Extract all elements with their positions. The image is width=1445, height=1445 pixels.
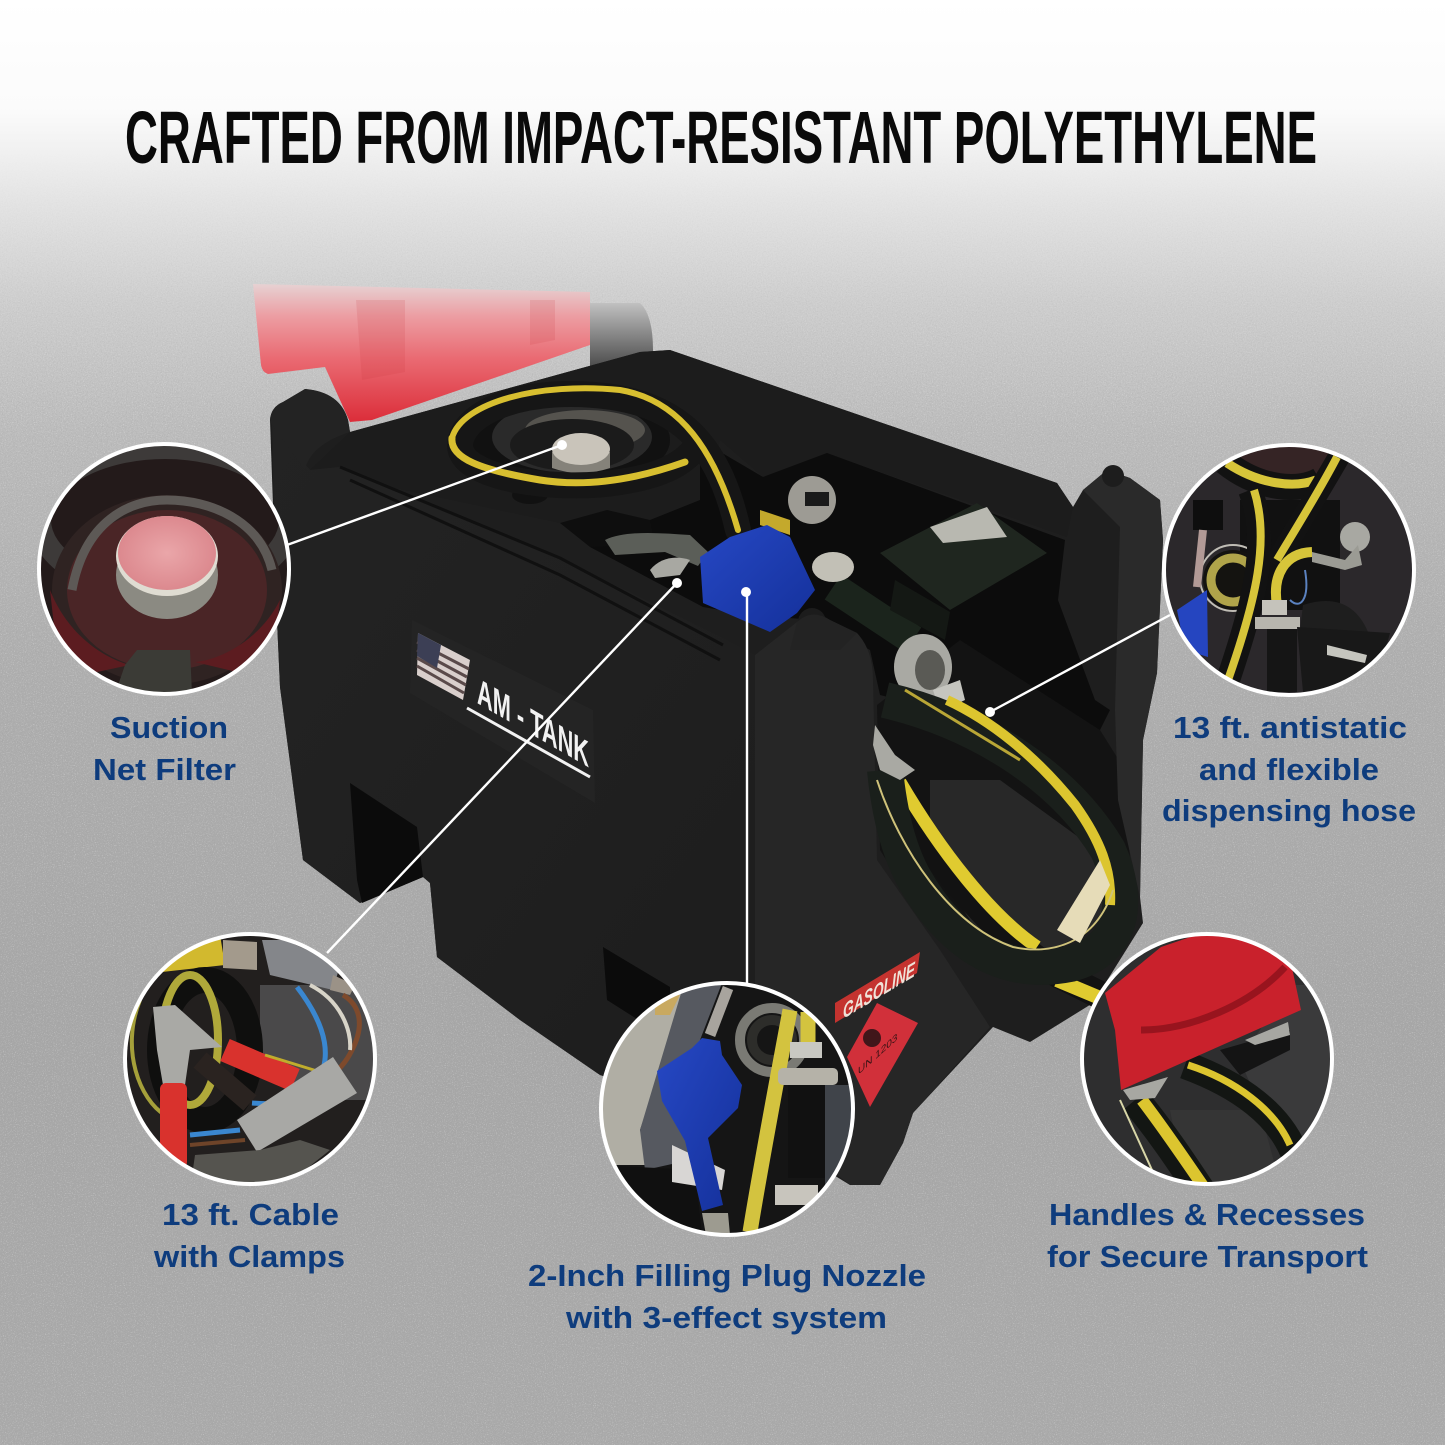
leader lines xyxy=(287,445,1170,985)
right end post xyxy=(1083,470,1163,897)
detail photo: clamps and cable xyxy=(120,934,375,1190)
front post cap over nozzle xyxy=(790,614,857,650)
tank silhouette xyxy=(270,350,1163,1185)
ring xyxy=(601,983,853,1235)
top deck plate xyxy=(310,350,1073,540)
callout: suction net filter xyxy=(39,444,290,787)
label xyxy=(93,710,236,787)
detail photo: blue nozzle xyxy=(601,983,855,1235)
grab slot xyxy=(560,510,655,547)
suction hose ring xyxy=(452,388,738,530)
front right pillar xyxy=(755,614,990,1185)
label: dispensing hose xyxy=(1162,793,1416,828)
gasoline hazard labels: GASOLINE xyxy=(843,956,915,1024)
gasoline hazard labels xyxy=(835,952,920,1107)
hose clamp xyxy=(873,725,915,780)
callout: handles and recesses xyxy=(1047,930,1368,1274)
label xyxy=(1162,710,1416,828)
open red lid xyxy=(253,284,653,422)
gasoline hazard labels: UN 1203 xyxy=(858,1030,898,1078)
tray floor behind hose xyxy=(877,640,1130,960)
filler bowl with cap xyxy=(460,392,670,504)
leader dots xyxy=(557,440,995,717)
ring xyxy=(125,934,375,1184)
label: with Clamps xyxy=(153,1239,345,1274)
label: Net Filter xyxy=(93,752,236,787)
warning sticker xyxy=(1057,860,1110,943)
ring xyxy=(1164,445,1414,695)
label: Suction xyxy=(110,710,228,745)
callout: cable with clamps xyxy=(120,934,375,1274)
detail photo: filter cap xyxy=(39,444,290,694)
label xyxy=(153,1197,345,1274)
coiled dispensing hose xyxy=(877,690,1120,1000)
detail photo: red handle xyxy=(1082,930,1335,1190)
label: 2-Inch Filling Plug Nozzle xyxy=(528,1258,926,1293)
ring xyxy=(39,444,289,694)
AM-TANK badge: AM - TANK xyxy=(477,671,589,776)
bottle-shaped left corner post xyxy=(270,389,350,470)
callout: filling plug nozzle xyxy=(528,983,926,1335)
label: with 3-effect system xyxy=(565,1300,887,1335)
label xyxy=(528,1258,926,1335)
label: for Secure Transport xyxy=(1047,1239,1368,1274)
label: 13 ft. antistatic xyxy=(1173,710,1407,745)
blue nozzle xyxy=(700,525,815,632)
AM-TANK badge xyxy=(410,620,595,803)
label xyxy=(1047,1197,1368,1274)
inner cavity xyxy=(590,440,1110,735)
label: Handles & Recesses xyxy=(1049,1197,1365,1232)
label: and flexible xyxy=(1199,752,1379,787)
left front face xyxy=(272,425,755,1110)
product: fuel tank xyxy=(253,284,1163,1185)
leg recesses xyxy=(350,783,423,903)
detail photo: hose and reel xyxy=(1166,447,1412,693)
label: 13 ft. Cable xyxy=(162,1197,339,1232)
ring xyxy=(1082,934,1332,1184)
pump and fittings xyxy=(605,476,1047,712)
callout: dispensing hose xyxy=(1162,420,1416,828)
flag xyxy=(417,633,470,700)
